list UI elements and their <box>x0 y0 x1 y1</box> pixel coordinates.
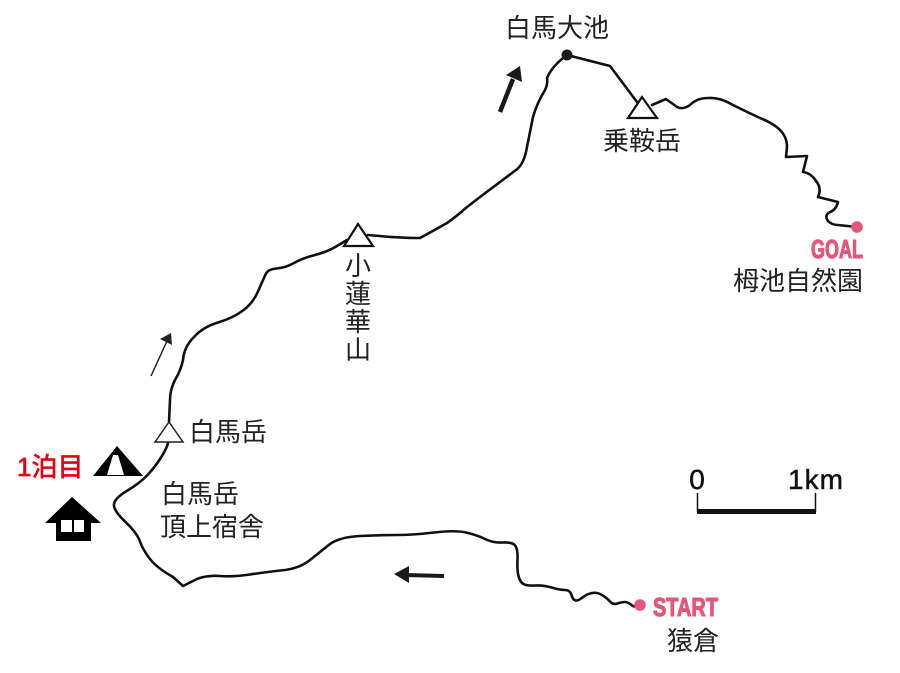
label: start: START <box>653 592 718 622</box>
icon: start dot <box>634 599 646 611</box>
route line <box>114 55 857 606</box>
label: Korenge-san: 蓮 <box>345 279 371 309</box>
scale bar <box>689 464 844 514</box>
label: summit hut <box>160 479 264 542</box>
label: Korenge-san: 華 <box>345 307 371 337</box>
label: Shirouma-dake: 白馬岳 <box>189 417 267 447</box>
route: start to Shirouma-dake <box>114 443 640 606</box>
icon: peak Norikura-dake <box>628 97 657 118</box>
label: goal: GOAL <box>811 234 863 264</box>
label: Tsugaike Shizenen: 栂池自然園 <box>733 266 863 296</box>
scale bar: 1km <box>788 464 844 495</box>
label: summit hut: 頂上宿舎 <box>160 512 264 542</box>
icon: goal dot <box>851 221 863 233</box>
label: Korenge-san: 小 <box>345 251 371 281</box>
icon: tent <box>93 446 143 476</box>
label: first night: 1泊目 <box>17 452 83 482</box>
label: Shirouma-oike: 白馬大池 <box>505 13 609 43</box>
label: Korenge-san: 山 <box>345 335 371 365</box>
route: Norikura-dake to goal <box>652 98 857 227</box>
label: Sarukura: 猿倉 <box>667 626 719 656</box>
route: Korenge-san to Norikura-dake <box>368 55 637 238</box>
label: summit hut: 白馬岳 <box>161 479 239 509</box>
icon: peak Korenge-san <box>344 224 373 246</box>
icon: Shirouma-oike dot <box>562 50 572 60</box>
label: Norikura-dake: 乗鞍岳 <box>603 126 681 156</box>
route: Shirouma-dake to Korenge-san <box>169 240 347 422</box>
scale bar: 0 <box>689 464 705 495</box>
arrow: top <box>500 66 522 112</box>
arrow: left <box>151 333 172 376</box>
arrow: bottom <box>394 566 444 583</box>
icon: hut <box>45 497 101 541</box>
icon: peak Shirouma-dake <box>155 422 183 442</box>
